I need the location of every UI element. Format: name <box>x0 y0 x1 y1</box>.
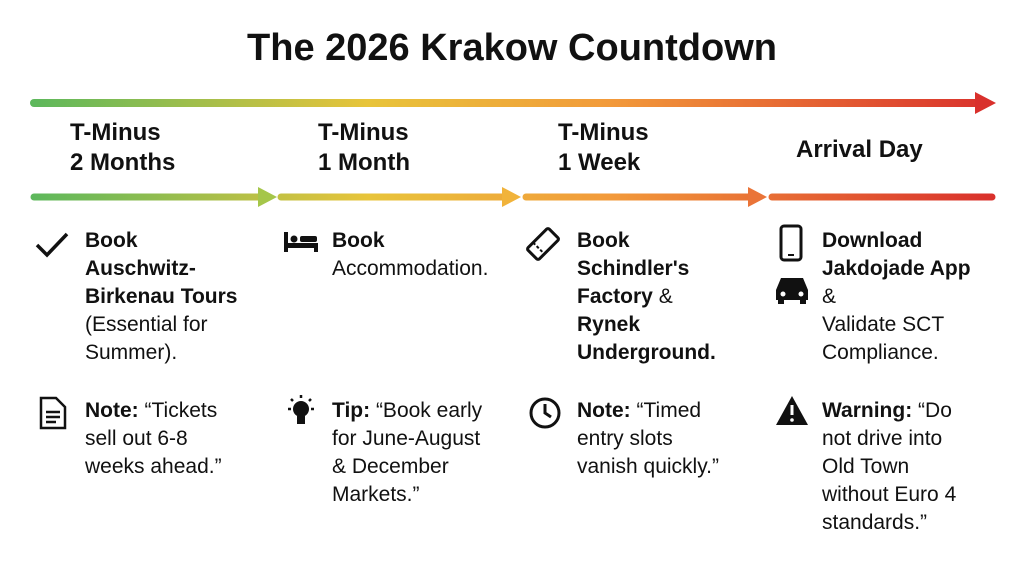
text: tours: Birkenau Tours <box>85 285 237 308</box>
heading: arrival: Arrival Day <box>796 136 923 163</box>
text: tours: Summer). <box>85 341 177 364</box>
heading: 1 month: 1 Month <box>318 149 410 176</box>
text: tip: Markets.” <box>332 483 420 506</box>
icon: ticket <box>526 227 560 261</box>
text: app: & <box>822 285 836 308</box>
text: timed entry: entry slots <box>577 427 673 450</box>
heading: 2 months: T-Minus <box>70 119 161 146</box>
text: tours: Book <box>85 229 138 252</box>
text: warning <box>822 399 956 534</box>
icon: document <box>40 396 66 430</box>
text: note tickets: Note: “Tickets <box>85 399 217 422</box>
text: warning: standards.” <box>822 511 927 534</box>
icon: phone & car <box>776 224 808 304</box>
text: accommodation: Book <box>332 229 384 252</box>
text: warning: Old Town <box>822 455 909 478</box>
text: app: Jakdojade App <box>822 257 971 280</box>
text: tip: Tip: “Book early <box>332 399 482 422</box>
text: tours: Auschwitz- <box>85 257 196 280</box>
text: accommodation <box>332 229 488 280</box>
text: app: Validate SCT <box>822 313 944 336</box>
text: tours <box>85 229 237 364</box>
heading: 1 month: T-Minus <box>318 119 409 146</box>
heading: 1 week: 1 Week <box>558 149 640 176</box>
icon: bed <box>284 232 318 252</box>
text: warning: without Euro 4 <box>822 483 956 506</box>
text: schindler: Underground. <box>577 341 716 364</box>
text: warning: Warning: “Do <box>822 399 952 422</box>
text: timed entry: vanish quickly.” <box>577 455 719 478</box>
heading: 2 months: 2 Months <box>70 149 175 176</box>
text: note tickets: sell out 6-8 <box>85 427 188 450</box>
text: tip <box>332 399 482 506</box>
text: accommodation: Accommodation. <box>332 257 488 280</box>
title: The 2026 Krakow Countdown <box>247 27 777 69</box>
text: note tickets: weeks ahead.” <box>85 455 222 478</box>
text: tip: for June-August <box>332 427 480 450</box>
text: note tickets <box>85 399 222 478</box>
text: schindler: Book <box>577 229 630 252</box>
text: schindler <box>577 229 716 364</box>
arrow: main timeline <box>30 92 996 207</box>
heading: 2 months <box>70 119 175 176</box>
icon: check <box>36 232 68 258</box>
text: schindler: Factory & <box>577 285 673 308</box>
heading: 1 week <box>558 119 649 176</box>
text: app: Download <box>822 229 922 252</box>
text: timed entry: Note: “Timed <box>577 399 701 422</box>
heading: 1 month <box>318 119 410 176</box>
text: warning: not drive into <box>822 427 942 450</box>
text: timed entry <box>577 399 719 478</box>
text: schindler: Schindler's <box>577 257 689 280</box>
icon: warning <box>776 396 808 425</box>
text: app: Compliance. <box>822 341 939 364</box>
icon: lightbulb <box>288 395 314 424</box>
text: tours: (Essential for <box>85 313 208 336</box>
text: schindler: Rynek <box>577 313 640 336</box>
text: tip: & December <box>332 455 449 478</box>
icon: clock <box>530 398 560 428</box>
text: app <box>822 229 971 364</box>
heading: 1 week: T-Minus <box>558 119 649 146</box>
